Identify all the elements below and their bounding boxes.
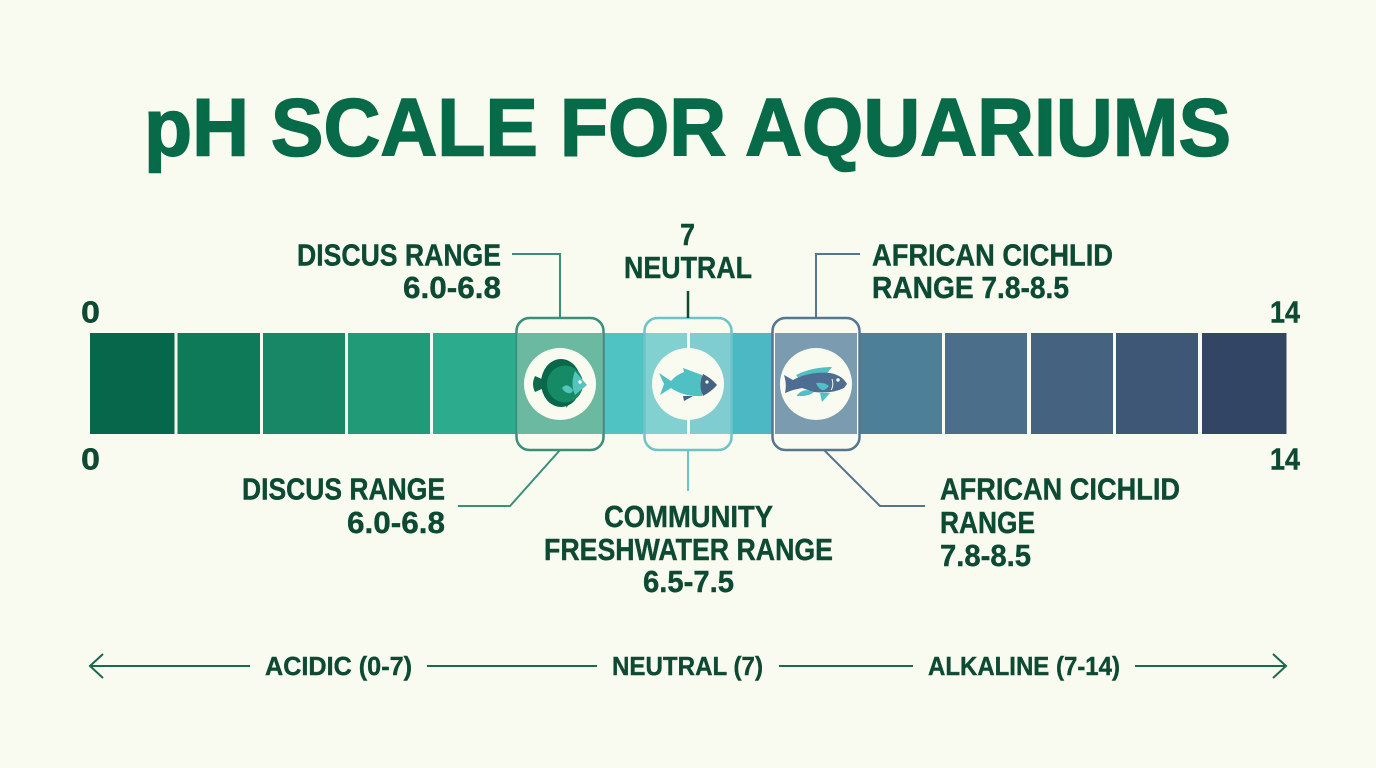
callout: discus range, bottom: 6.0-6.8 [347,505,445,540]
icon: discus fish [524,348,596,420]
discus range marker box [516,318,604,450]
callout: discus range, bottom [242,450,560,540]
community range marker box [644,318,732,450]
icon: african cichlid fish [780,348,852,420]
label: acidic: ACIDIC (0-7) [265,651,412,681]
scale end labels: bottom: 0 [81,442,100,476]
callout: neutral point: NEUTRAL [624,250,752,285]
callout: african cichlid range, bottom: RANGE [940,505,1035,540]
callout: discus range, top: DISCUS RANGE [297,238,501,272]
scale end labels: bottom [81,442,1301,476]
callout: community freshwater range: 6.5-7.5 [643,564,734,599]
scale end labels: top [81,294,1301,330]
acidic-to-alkaline axis with arrows [90,651,1286,681]
callout: community freshwater range: FRESHWATER RANGE [544,532,833,567]
callout: african cichlid range, bottom: AFRICAN CICHLID [940,472,1180,506]
african cichlid range marker box [772,318,860,450]
pH colour bar [90,333,1286,434]
callout: african cichlid range, bottom: 7.8-8.5 [940,538,1031,573]
callout: neutral point [624,217,752,318]
icon: community fish [652,348,724,420]
scale end labels: top: 0 [81,294,100,330]
arrow: toward alkaline [1135,654,1286,678]
callout: african cichlid range, top [816,238,1113,318]
callout: community freshwater range: COMMUNITY [604,499,773,534]
title: pH SCALE FOR AQUARIUMS [144,82,1231,174]
label: alkaline: ALKALINE (7-14) [928,651,1120,681]
callout: discus range, top [297,238,560,318]
callout: african cichlid range, top: RANGE 7.8-8.5 [872,270,1069,305]
callout: community freshwater range [544,450,833,599]
scale end labels: bottom: 14 [1270,442,1301,476]
callout: neutral point: 7 [680,217,695,252]
callout: discus range, top: 6.0-6.8 [403,270,501,305]
callout: african cichlid range, top: AFRICAN CICHLID [872,238,1113,272]
arrow: toward acidic [90,654,250,678]
callout: african cichlid range, bottom [824,450,1180,573]
label: neutral: NEUTRAL (7) [612,651,763,681]
callout: discus range, bottom: DISCUS RANGE [242,472,445,506]
scale end labels: top: 14 [1270,294,1301,330]
